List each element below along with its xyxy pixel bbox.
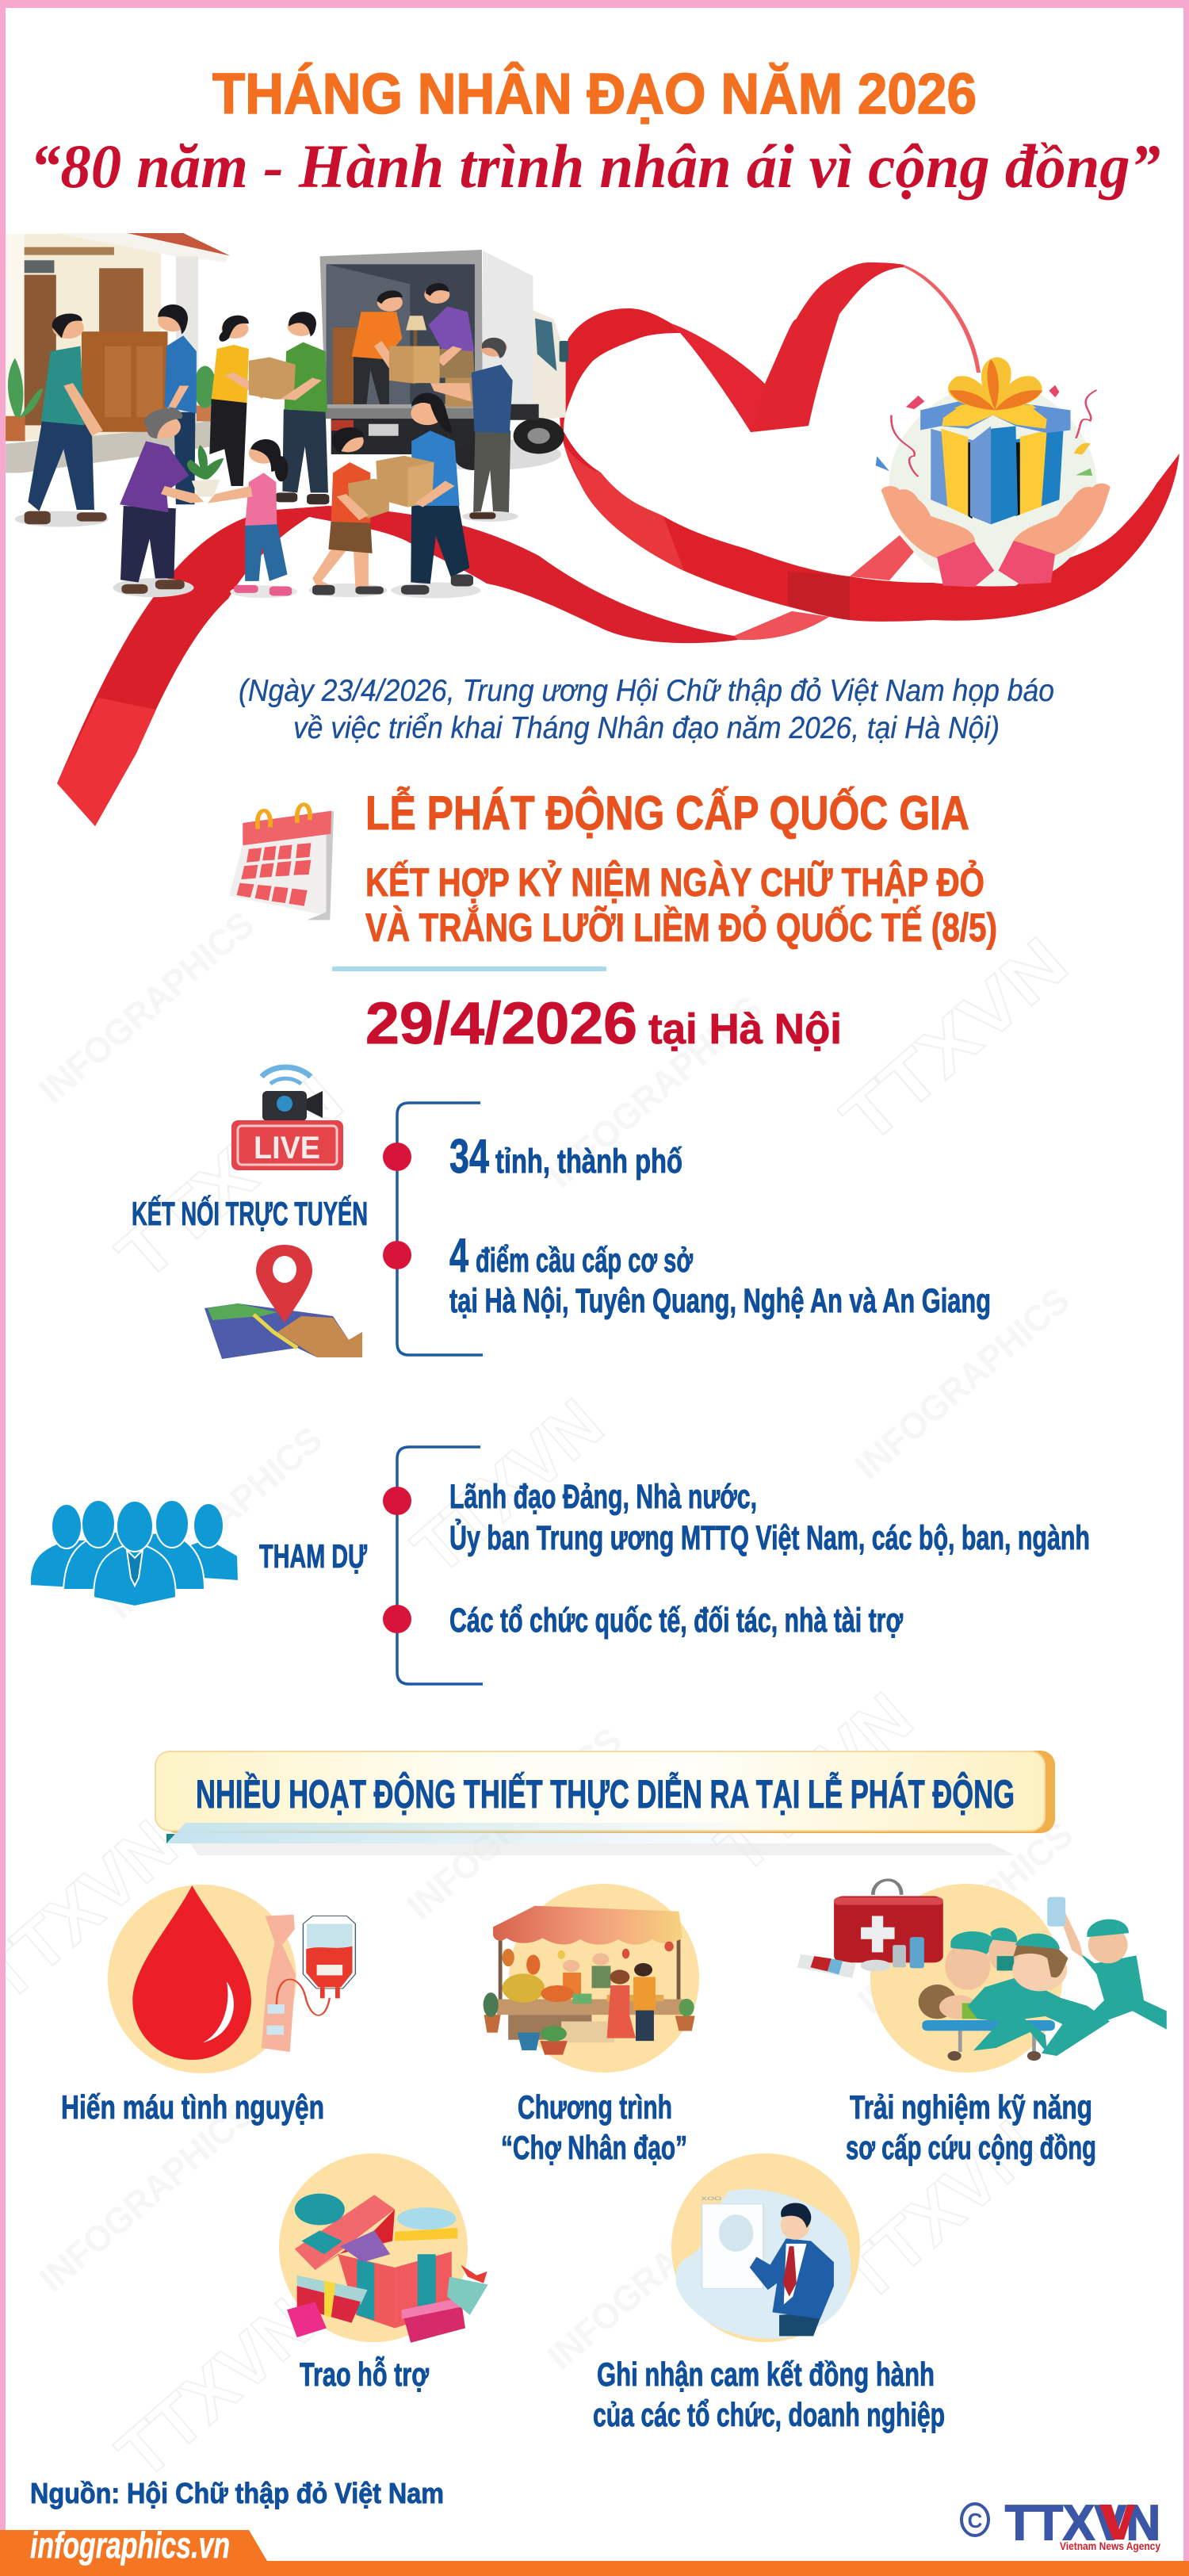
- text: attendee leaders: [449, 1478, 1090, 1557]
- text: INFOGRAPHICS: [539, 2169, 770, 2378]
- hands and sleeves: [881, 484, 1111, 587]
- text: international organisations: Các tổ chức quốc tế, đối tác, nhà tài trợ: [449, 1602, 903, 1640]
- text: 34 provinces: [449, 1130, 682, 1183]
- text: 34 provinces: 34: [449, 1130, 489, 1183]
- text: 4 bridge points: điểm cầu cấp cơ sở: [476, 1242, 693, 1280]
- icon: blood drop: [132, 1885, 251, 2060]
- date and place: 29/4/2026: [365, 990, 637, 1056]
- text: INFOGRAPHICS: [399, 1719, 629, 1927]
- caption: [239, 674, 1054, 745]
- ceremony heading: KẾT HỢP KỶ NIỆM NGÀY CHỮ THẬP ĐỎ: [365, 859, 984, 905]
- ceremony heading: LỄ PHÁT ĐỘNG CẤP QUỐC GIA: [365, 787, 969, 840]
- activity: giving support: [279, 2153, 488, 2343]
- title: “80 năm - Hành trình nhân ái vì cộng đồng”: [30, 132, 1160, 201]
- icon: blood bag: [303, 1916, 355, 1988]
- date and place: tại Hà Nội: [648, 1005, 842, 1053]
- text: TTXVN: [702, 1678, 927, 1889]
- caption: về việc triển khai Tháng Nhân đạo năm 2026, tại Hà Nội): [293, 711, 1000, 745]
- text: 34 provinces: tỉnh, thành phố: [495, 1143, 682, 1181]
- bracket: online connection list: [383, 1103, 483, 1355]
- text: TTXVN: [103, 1060, 358, 1296]
- presentation board: XOO: [701, 2195, 722, 2201]
- people moving goods: [15, 283, 518, 599]
- boxes carried by children: [337, 456, 454, 520]
- person: woman in yellow shirt: [209, 316, 267, 486]
- text: TTXVN: [103, 2283, 328, 2494]
- box between helpers: [249, 357, 322, 400]
- person: woman in blue: [391, 393, 481, 599]
- person: man in green shirt: [275, 312, 329, 504]
- text: attendee leaders: Lãnh đạo Đảng, Nhà nước,: [449, 1478, 757, 1516]
- potted plants: [484, 1992, 695, 2055]
- person: man in purple in truck: [424, 283, 474, 377]
- ceremony heading: VÀ TRẮNG LƯỠI LIỀM ĐỎ QUỐC TẾ (8/5): [365, 905, 997, 950]
- activity: blood donation: [108, 1885, 355, 2073]
- icon: gift boxes: [338, 2254, 395, 2328]
- label: first aid: Trải nghiệm kỹ năng: [850, 2088, 1092, 2126]
- logo: TTXVN: Vietnam News Agency: [1060, 2540, 1160, 2552]
- egg backdrop: [889, 382, 1096, 586]
- title: THÁNG NHÂN ĐẠO NĂM 2026: [212, 62, 977, 126]
- text: INFOGRAPHICS: [847, 1279, 1077, 1487]
- businessman: [750, 2203, 834, 2336]
- text: TTXVN: [828, 2106, 1053, 2317]
- person: man in navy shirt: [430, 338, 518, 522]
- logo: TTXVN: C: [968, 2509, 983, 2532]
- person: boy in red: [308, 427, 388, 597]
- gift box: [920, 400, 1070, 524]
- person: man in blue shirt: [158, 304, 197, 504]
- date and place: [365, 990, 842, 1056]
- icon: live camera: LIVE: [254, 1131, 320, 1166]
- label: humanitarian market: Chương trình: [518, 2088, 672, 2126]
- footer bar: infographics.vn: [30, 2524, 230, 2566]
- text: INFOGRAPHICS: [850, 1813, 1080, 2022]
- icon: attendees group: [30, 1500, 239, 1606]
- stall people: [563, 1953, 610, 1994]
- potted plant: [187, 445, 224, 496]
- person: man in orange in truck: [352, 290, 403, 404]
- market awning: [493, 1906, 682, 1945]
- activity: first aid: [797, 1880, 1167, 2073]
- confetti: [876, 385, 1096, 477]
- bracket: attendee list: [383, 1447, 483, 1684]
- text: 4 bridge points: tại Hà Nội, Tuyên Quang, Nghệ An và An Giang: [449, 1282, 991, 1320]
- person: man in teal shirt: [15, 314, 109, 527]
- label: humanitarian market: “Chợ Nhân đạo”: [501, 2129, 687, 2166]
- text: INFOGRAPHICS: [31, 903, 262, 1112]
- person: girl in pink: [208, 439, 297, 598]
- icon: medics with stretcher: [919, 1897, 1167, 2061]
- label: recording commitments: Ghi nhận cam kết đồng hành: [597, 2356, 935, 2393]
- icon: live camera: [231, 1067, 343, 1170]
- icon: calendar: [229, 805, 334, 920]
- presentation board: [701, 2195, 763, 2288]
- text: INFOGRAPHICS: [99, 1418, 330, 1627]
- text: 4 bridge points: 4: [449, 1229, 468, 1282]
- label: recording commitments: [593, 2356, 945, 2433]
- icon: first aid kit: [797, 1880, 943, 1978]
- text: TTXVN: [828, 923, 1083, 1159]
- text: INFOGRAPHICS: [31, 2092, 262, 2300]
- person: grandmother: [113, 408, 204, 597]
- stall counter with produce: [497, 1973, 682, 2042]
- caption: (Ngày 23/4/2026, Trung ương Hội Chữ thập đỏ Việt Nam họp báo: [239, 674, 1054, 708]
- red ribbon heart: [57, 262, 1179, 826]
- label: first aid: [846, 2088, 1096, 2166]
- title: [30, 62, 1160, 201]
- activity: humanitarian market: [484, 1884, 699, 2073]
- house and furniture: [6, 233, 230, 473]
- text: INFOGRAPHICS: [539, 987, 770, 1196]
- truck: [320, 250, 568, 470]
- label: humanitarian market: [501, 2088, 687, 2166]
- label: giving support: Trao hỗ trợ: [300, 2355, 429, 2393]
- bow: [948, 357, 1042, 410]
- label: online connection: KẾT NỐI TRỰC TUYẾN: [132, 1194, 368, 1232]
- footer bar: [0, 2524, 1189, 2576]
- label: attending: THAM DỰ: [259, 1537, 367, 1575]
- text: TTXVN: [399, 1384, 617, 1590]
- icon: arm: [262, 1915, 296, 2052]
- ceremony heading: [365, 787, 997, 950]
- banner: activities heading: [155, 1751, 1055, 1855]
- label: blood donation: Hiến máu tình nguyện: [61, 2088, 324, 2126]
- text: 4 bridge points: [449, 1229, 991, 1320]
- logo: TTXVN: TTXVN: [1005, 2496, 1160, 2551]
- activity: recording commitments: [671, 2153, 860, 2342]
- label: recording commitments: của các tổ chức, doanh nghiệp: [593, 2396, 945, 2433]
- icon: map pin: [205, 1245, 362, 1359]
- box in truck: [389, 346, 440, 384]
- customers: [607, 1963, 656, 2041]
- source: Nguồn: Hội Chữ thập đỏ Việt Nam: [30, 2477, 444, 2509]
- gift in open hands: [876, 357, 1111, 587]
